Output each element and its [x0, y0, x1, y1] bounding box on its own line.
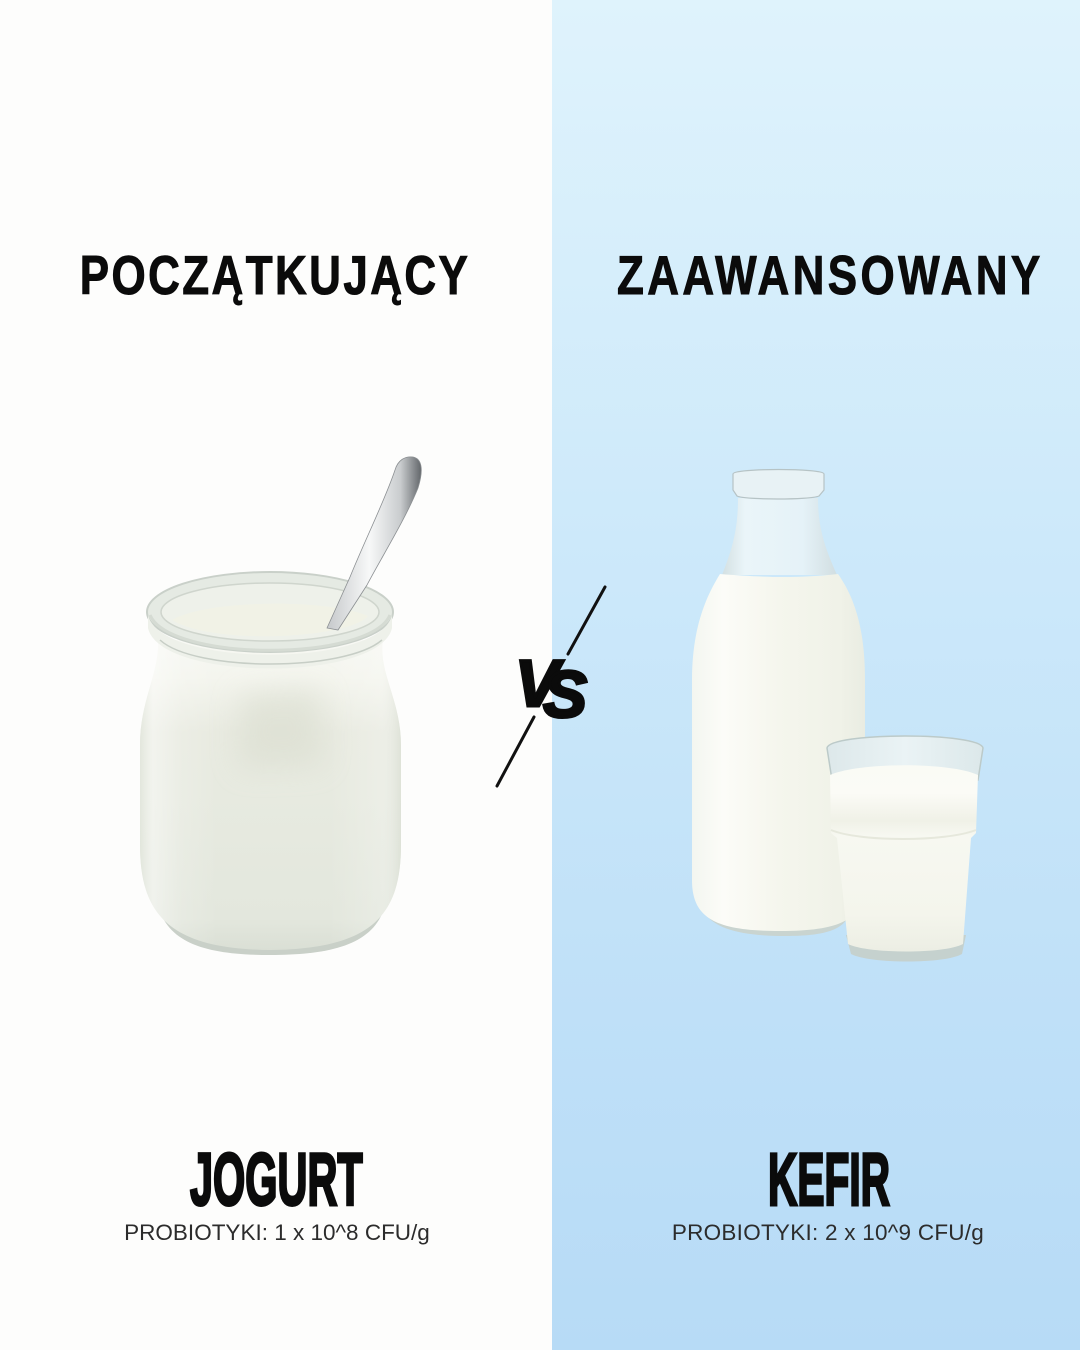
heading: zaawansowany: ZAAWANSOWANY: [617, 244, 1044, 306]
glass milk: [830, 765, 978, 952]
bottle base: [704, 912, 850, 936]
jar rim: [147, 572, 393, 652]
yogurt surface: [172, 604, 368, 636]
icon: milk bottle and glass: [692, 468, 984, 962]
bottle milk: [692, 574, 865, 931]
jar glass base: [158, 905, 385, 955]
text: kefir probiotics: PROBIOTYKI: 2 x 10^9 CFU/g: [672, 1220, 984, 1245]
bottle neck: [722, 498, 837, 575]
glass upper: [827, 736, 983, 780]
text: jogurt probiotics: PROBIOTYKI: 1 x 10^8 CFU/g: [124, 1220, 430, 1245]
icon: vs divider: [495, 585, 607, 788]
heading: początkujący: POCZĄTKUJĄCY: [80, 244, 470, 306]
icon: yogurt jar with spoon: [140, 456, 422, 955]
heading: jogurt: JOGURT: [190, 1138, 363, 1221]
panel: right blue background: [552, 0, 1080, 1350]
heading: kefir: KEFIR: [768, 1138, 890, 1221]
bottle lip: [733, 470, 824, 499]
icon: vs divider: V: [515, 646, 564, 720]
glass base: [846, 935, 966, 962]
spoon: [327, 457, 421, 630]
icon: vs divider: S: [543, 657, 587, 731]
jar shading band: [240, 690, 322, 768]
jar body: [140, 640, 401, 950]
